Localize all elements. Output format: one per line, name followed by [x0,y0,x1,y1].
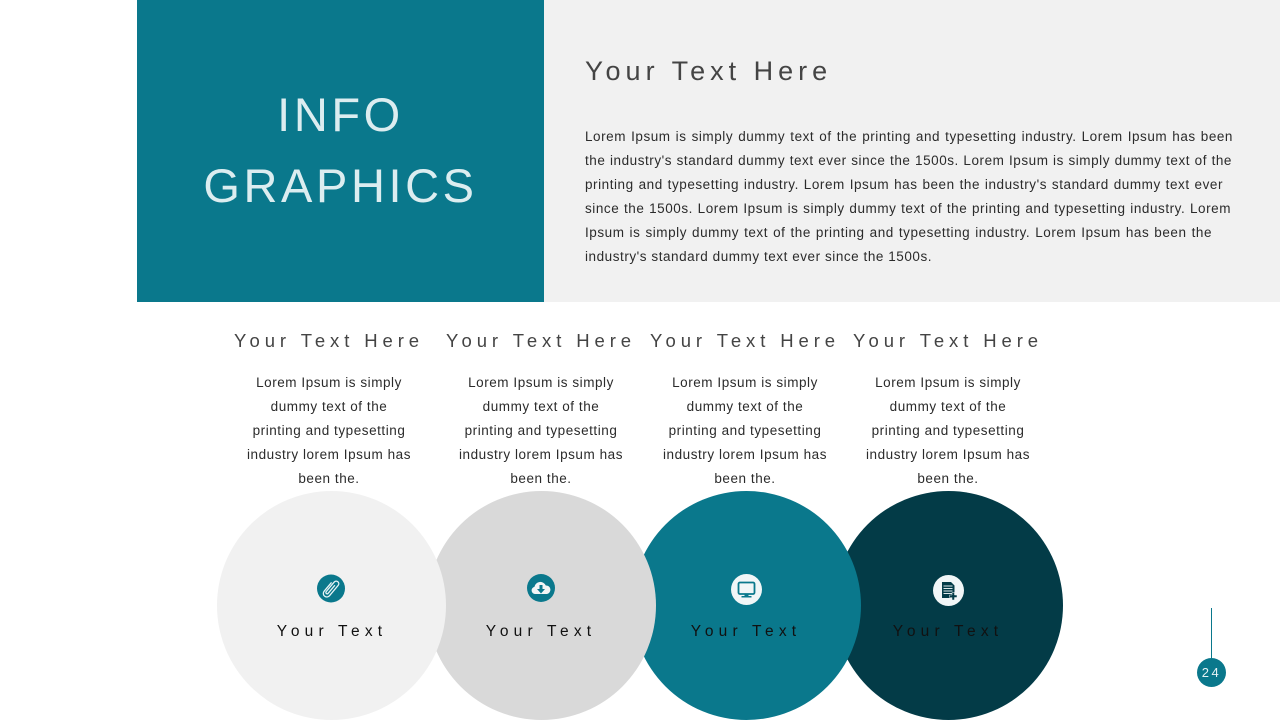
text block: column 3: been the. [714,471,776,486]
intro paragraph: industry's standard dummy text ever since the 1500s. [585,249,932,264]
text block: column 1: dummy text of the [271,399,387,414]
intro paragraph: the industry's standard dummy text ever since the 1500s. Lorem Ipsum is simply dummy text of the [585,153,1232,168]
label: circle 3: Your Text [691,623,801,640]
text block: column 4: Lorem Ipsum is simply [875,375,1021,390]
panel: intro text [544,0,1280,302]
circle: teal [632,491,861,720]
heading: column 1: Your Text Here [234,330,424,351]
text block: column 3: printing and typesetting [669,423,821,438]
text block: column 3 [663,375,827,486]
text block: column 3: Lorem Ipsum is simply [672,375,818,390]
text block: column 3: industry lorem Ipsum has [663,447,827,462]
page number [1197,658,1226,687]
intro paragraph: since the 1500s. Lorem Ipsum is simply dummy text of the printing and typesetting industry. Lorem [585,201,1231,216]
text block: column 4: industry lorem Ipsum has [866,447,1030,462]
text block: column 2 [459,375,623,486]
heading: column 4: Your Text Here [853,330,1043,351]
label: circle 1: Your Text [277,623,387,640]
text block: column 2: been the. [510,471,572,486]
text block: column 1: been the. [298,471,360,486]
text block: column 4: printing and typesetting [872,423,1024,438]
text block: column 1: Lorem Ipsum is simply [256,375,402,390]
intro paragraph: printing and typesetting industry. Lorem Ipsum has been the industry's standard dummy text ever [585,177,1223,192]
intro paragraph [585,129,1233,264]
text block: column 4: been the. [917,471,979,486]
text block: column 2: printing and typesetting [465,423,617,438]
circle: mid grey [427,491,656,720]
text block: column 1 [247,375,411,486]
label: circle 2: Your Text [486,623,596,640]
text block: column 4: dummy text of the [890,399,1006,414]
intro heading: Your Text Here [585,56,832,86]
icon: document plus [933,575,964,606]
icon: cloud download [527,574,555,602]
intro paragraph: Lorem Ipsum is simply dummy text of the printing and typesetting industry. Lorem Ipsum has been [585,129,1233,144]
label: circle 4: Your Text [893,623,1003,640]
panel: teal title block [137,0,544,302]
text block: column 4 [866,375,1030,486]
title: INFO [277,88,404,141]
circle: dark teal [834,491,1063,720]
title: GRAPHICS [203,159,478,212]
text block: column 2: dummy text of the [483,399,599,414]
heading: column 2: Your Text Here [446,330,636,351]
text block: column 2: industry lorem Ipsum has [459,447,623,462]
title [203,88,478,212]
icon: paperclip [317,574,345,602]
text block: column 1: printing and typesetting [253,423,405,438]
text block: column 2: Lorem Ipsum is simply [468,375,614,390]
icon: monitor [731,574,762,605]
text block: column 3: dummy text of the [687,399,803,414]
intro paragraph: Ipsum is simply dummy text of the printing and typesetting industry. Lorem Ipsum has been the [585,225,1212,240]
circle: light grey [217,491,446,720]
text block: column 1: industry lorem Ipsum has [247,447,411,462]
heading: column 3: Your Text Here [650,330,840,351]
page number: 24 [1202,665,1221,680]
